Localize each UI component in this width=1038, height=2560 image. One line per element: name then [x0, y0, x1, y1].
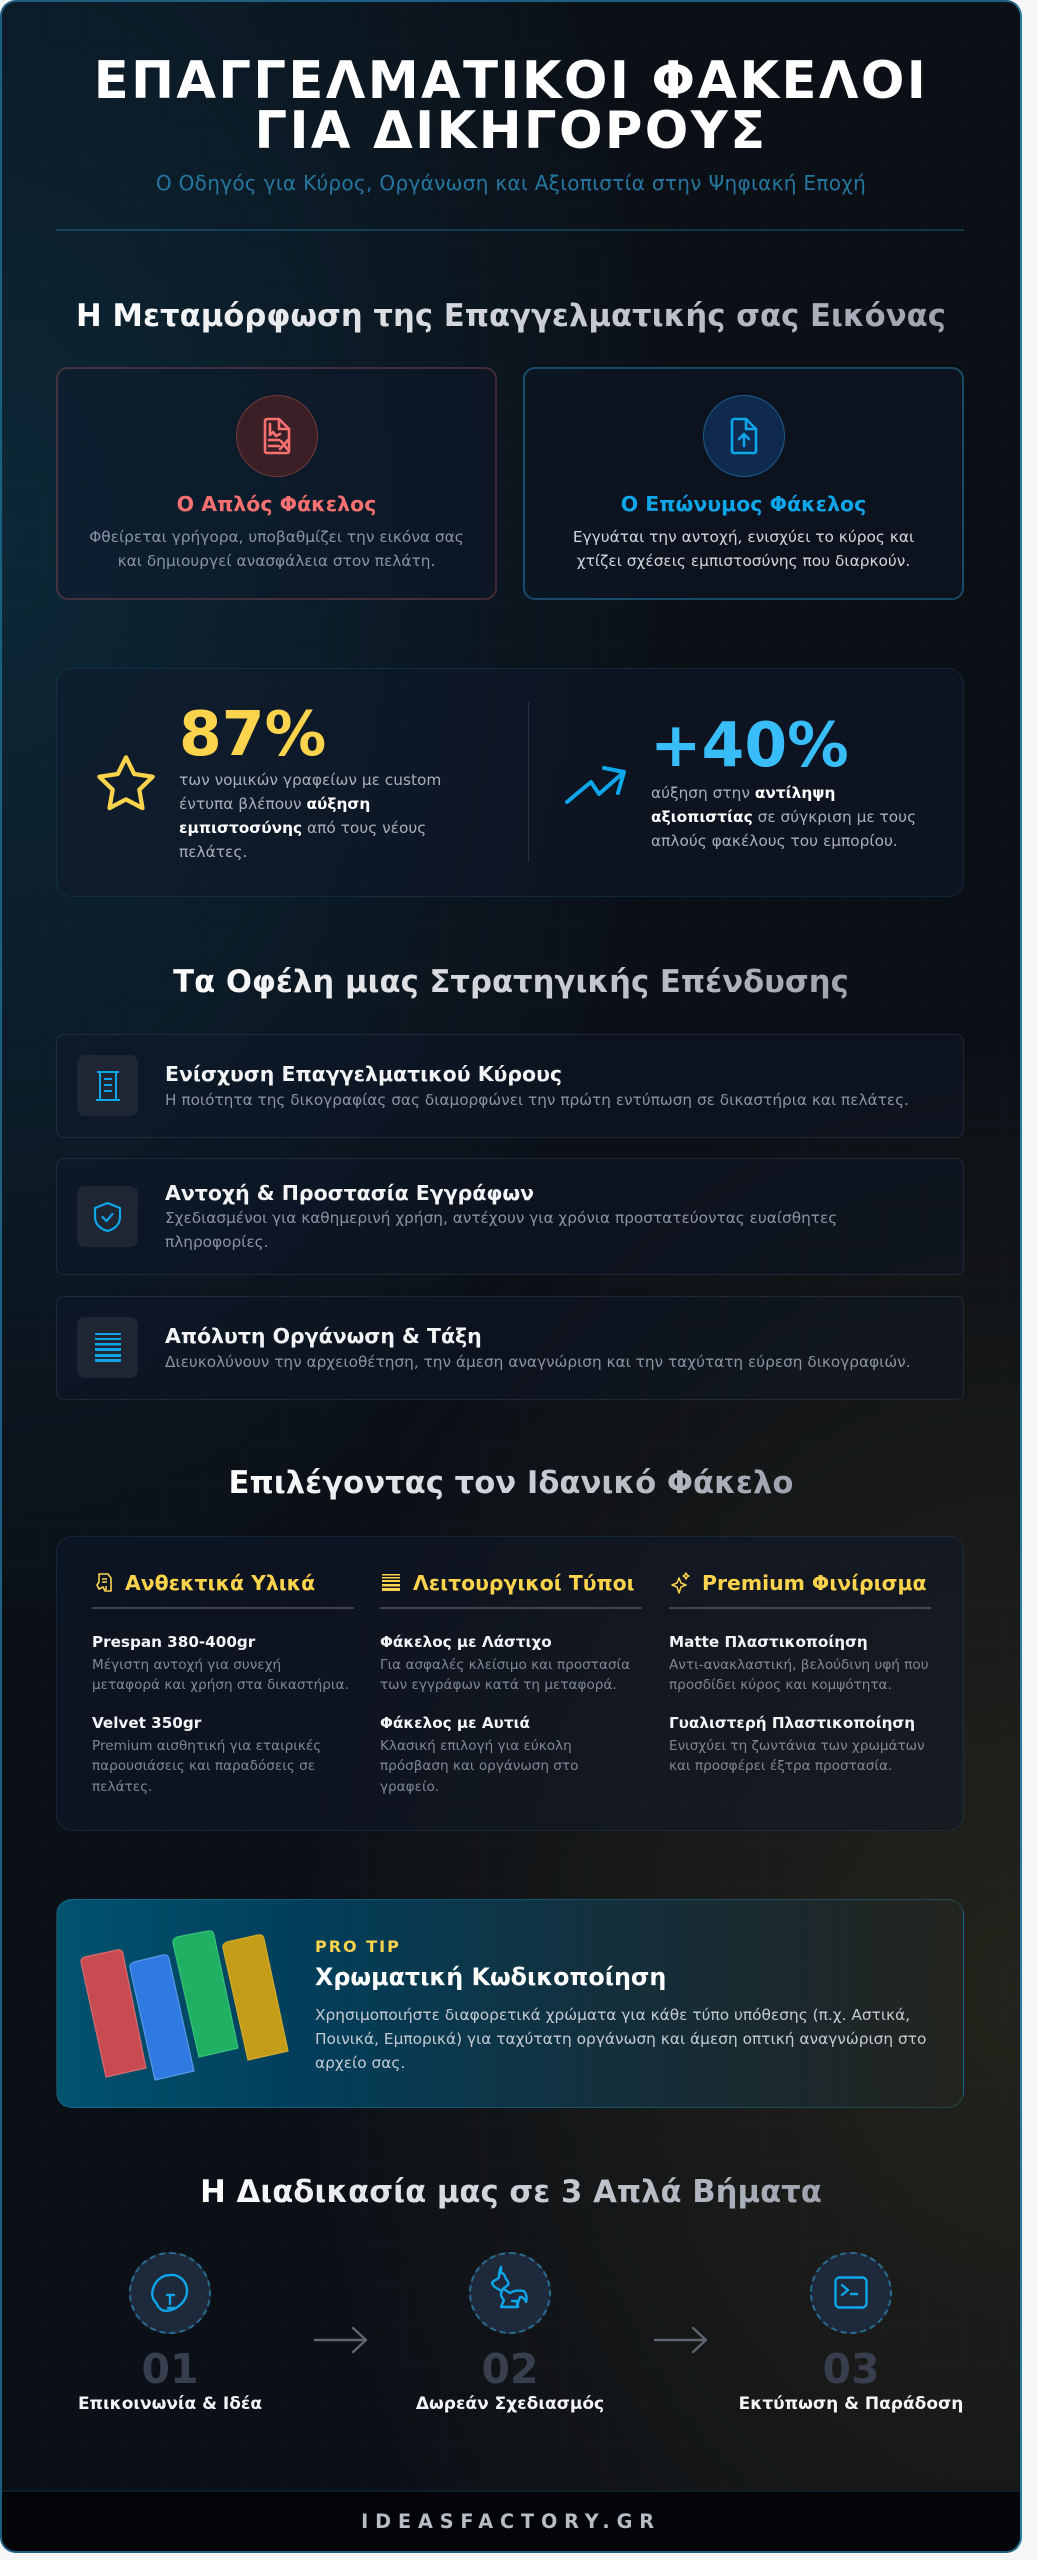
plain folder text: Φθείρεται γρήγορα, υποβαθμίζει την εικόνα σας	[89, 528, 464, 546]
branded folder heading: Ο Επώνυμος Φάκελος	[621, 492, 866, 516]
section heading: process: Η Διαδικασία μας σε 3 Απλά Βήματα	[200, 2175, 822, 2210]
arrow	[314, 2326, 368, 2354]
stat text: 87%: εμπιστοσύνης από τους νέους	[179, 819, 426, 837]
stat text: +40%	[651, 784, 916, 850]
step number: 03	[822, 2345, 880, 2393]
item title: Φάκελος με Λάστιχο	[380, 1633, 552, 1651]
benefit text	[165, 1209, 837, 1251]
icon: document with up arrow	[703, 395, 785, 477]
stat text: +40%: απλούς φακέλους του εμπορίου.	[651, 832, 898, 850]
item text	[92, 1657, 349, 1693]
step 1	[78, 2252, 262, 2414]
pro tip text: Ποινικά, Εμπορικά) για ταχύτατη οργάνωση και άμεση οπτική αναγνώριση στο	[315, 2030, 926, 2048]
icon: sparkles	[671, 1572, 690, 1594]
icon: document	[77, 1055, 138, 1116]
benefit text: πληροφορίες.	[165, 1233, 268, 1251]
title: ΕΠΑΓΓΕΛΜΑΤΙΚΟΙ ΦΑΚΕΛΟΙ	[94, 51, 928, 111]
benefit card: protection	[56, 1158, 964, 1275]
header divider line	[56, 229, 964, 231]
step label: Επικοινωνία & Ιδέα	[78, 2394, 262, 2414]
icon: stacked lines	[77, 1317, 138, 1378]
item text: γραφείο.	[380, 1779, 439, 1795]
item text: και προσφέρει έξτρα προστασία.	[669, 1758, 892, 1774]
benefit card: prestige	[56, 1034, 964, 1138]
step label: Εκτύπωση & Παράδοση	[739, 2394, 963, 2414]
section heading: benefits: Τα Οφέλη μιας Στρατηγικής Επένδυσης	[173, 965, 849, 1000]
branded folder text: χτίζει σχέσεις εμπιστοσύνης που διαρκούν.	[577, 552, 910, 570]
plain folder text	[89, 528, 464, 570]
icon: lightbulb	[129, 2252, 211, 2334]
arrow	[654, 2326, 708, 2354]
subtitle: Ο Οδηγός για Κύρος, Οργάνωση και Αξιοπιστία στην Ψηφιακή Εποχή	[156, 171, 866, 195]
plain folder heading: Ο Απλός Φάκελος	[177, 492, 376, 516]
item title: Φάκελος με Αυτιά	[380, 1714, 530, 1732]
item title: Matte Πλαστικοποίηση	[669, 1633, 868, 1651]
benefit title: Αντοχή & Προστασία Εγγράφων	[165, 1181, 534, 1205]
item text	[92, 1738, 321, 1795]
item text: Αντι-ανακλαστική, βελούδινη υφή που	[669, 1657, 929, 1673]
benefit title: Απόλυτη Οργάνωση & Τάξη	[165, 1324, 482, 1348]
icon: trending arrow	[564, 766, 626, 804]
stat: 87%: 87%	[179, 698, 326, 770]
section heading: choosing the folder: Επιλέγοντας τον Ιδανικό Φάκελο	[229, 1466, 793, 1501]
icon: star	[97, 755, 155, 810]
item title: Γυαλιστερή Πλαστικοποίηση	[669, 1714, 915, 1732]
item text: Ενισχύει τη ζωντάνια των χρωμάτων	[669, 1738, 925, 1754]
icon: damaged document	[236, 395, 318, 477]
panel: branded folder	[523, 367, 964, 600]
section heading: transformation: Η Μεταμόρφωση της Επαγγελματικής σας Εικόνας	[76, 299, 946, 334]
item text: προσδίδει κύρος και κομψότητα.	[669, 1677, 892, 1693]
item text: πελάτες.	[92, 1779, 152, 1795]
item text: Μέγιστη αντοχή για συνεχή	[92, 1657, 281, 1673]
benefit title: Ενίσχυση Επαγγελματικού Κύρους	[165, 1062, 562, 1086]
heading: finishes: Premium Φινίρισμα	[702, 1571, 926, 1595]
plain folder text: και δημιουργεί ανασφάλεια στον πελάτη.	[118, 552, 435, 570]
item text: Premium αισθητική για εταιρικές	[92, 1738, 321, 1754]
step label: Δωρεάν Σχεδιασμός	[416, 2394, 604, 2414]
step number: 01	[141, 2345, 199, 2393]
item title: Prespan 380-400gr	[92, 1633, 255, 1651]
benefit text: Διευκολύνουν την αρχειοθέτηση, την άμεση αναγνώριση και την ταχύτατη εύρεση δικογραφιών.	[165, 1353, 911, 1371]
panel: plain folder	[56, 367, 497, 600]
step 2	[416, 2252, 604, 2414]
stat: +40%: +40%	[650, 709, 849, 781]
benefit card: organization	[56, 1296, 964, 1400]
stat text: +40%: αύξηση στην αντίληψη	[651, 784, 835, 802]
column: finishes	[669, 1571, 931, 1774]
item text	[380, 1738, 578, 1795]
title: ΓΙΑ ΔΙΚΗΓΟΡΟΥΣ	[254, 101, 768, 161]
stats divider	[528, 702, 529, 862]
item text: πρόσβαση και οργάνωση στο	[380, 1758, 578, 1774]
item text: Για ασφαλές κλείσιμο και προστασία	[380, 1657, 630, 1673]
stat text: 87%: των νομικών γραφείων με custom	[179, 771, 441, 789]
illustration: coloured folders	[80, 1930, 289, 2081]
item text: μεταφορά και χρήση στα δικαστήρια.	[92, 1677, 349, 1693]
column: types	[380, 1571, 642, 1795]
icon: shield	[77, 1186, 138, 1247]
item text: παρουσιάσεις και παραδόσεις σε	[92, 1758, 315, 1774]
pro tip label: PRO TIP	[315, 1937, 401, 1956]
step 3	[739, 2252, 963, 2414]
column: materials	[92, 1571, 354, 1795]
benefit text: Η ποιότητα της δικογραφίας σας διαμορφώνει την πρώτη εντύπωση σε δικαστήρια και πελάτες.	[165, 1091, 909, 1109]
icon: types	[382, 1574, 400, 1591]
icon: materials	[96, 1573, 112, 1592]
pro tip text	[315, 2006, 926, 2072]
heading: materials: Ανθεκτικά Υλικά	[125, 1571, 315, 1595]
title	[94, 51, 928, 161]
item title: Velvet 350gr	[92, 1714, 201, 1732]
item text	[669, 1657, 929, 1693]
branded folder text: Εγγυάται την αντοχή, ενισχύει το κύρος και	[573, 528, 914, 546]
heading: types: Λειτουργικοί Τύποι	[413, 1571, 635, 1595]
stat text: 87%: πελάτες.	[179, 843, 247, 861]
item text	[380, 1657, 630, 1693]
stat text: +40%: αξιοπιστίας σε σύγκριση με τους	[651, 808, 916, 826]
item text: των εγγράφων κατά τη μεταφορά.	[380, 1677, 617, 1693]
item text	[669, 1738, 925, 1774]
footer	[2, 2490, 1020, 2553]
panel: pro tip	[56, 1899, 964, 2108]
panel: folder options	[56, 1536, 964, 1831]
pro tip text: Χρησιμοποιήστε διαφορετικά χρώματα για κάθε τύπο υπόθεσης (π.χ. Αστικά,	[315, 2006, 910, 2024]
icon: design mark	[469, 2252, 551, 2334]
pro tip heading: Χρωματική Κωδικοποίηση	[315, 1963, 666, 1991]
panel: statistics	[56, 668, 964, 897]
branded folder text	[573, 528, 914, 570]
step number: 02	[481, 2345, 539, 2393]
stat text: 87%: έντυπα βλέπουν αύξηση	[179, 795, 370, 813]
icon: terminal	[810, 2252, 892, 2334]
pro tip text: αρχείο σας.	[315, 2054, 405, 2072]
item text: Κλασική επιλογή για εύκολη	[380, 1738, 572, 1754]
footer brand: IDEASFACTORY.GR	[361, 2510, 661, 2533]
benefit text: Σχεδιασμένοι για καθημερινή χρήση, αντέχουν για χρόνια προστατεύοντας ευαίσθητες	[165, 1209, 837, 1227]
stat text: 87%	[179, 771, 441, 861]
